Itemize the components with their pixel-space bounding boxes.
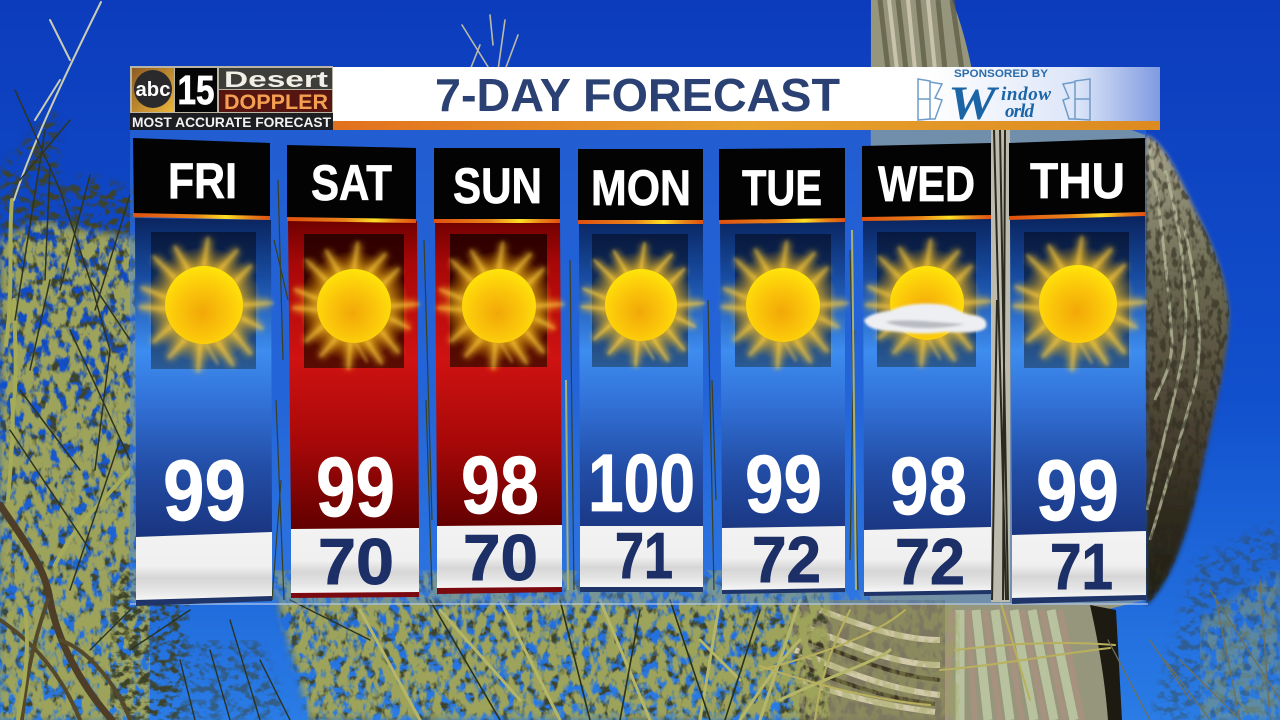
high temperature: 98 [890,441,967,532]
icon: sun [1014,232,1146,370]
high temperature: 99 [1036,443,1119,539]
lower rim of overlay [130,603,1148,605]
header orange strip [333,121,1160,130]
station logo: abc [136,79,170,101]
column: Sunday [434,148,564,594]
station logo: Desert [224,67,329,92]
sponsor: Window World [918,68,1090,130]
column: Friday [133,138,272,606]
high temperature: 99 [163,443,246,539]
cactus ribs seen between Wednesday and Thursday [991,130,1010,602]
column: Saturday [287,145,419,598]
column: Friday: FRI [168,153,237,209]
column: Tuesday [719,148,848,596]
low temperature: 72 [895,525,965,598]
column: Wednesday: WED [878,156,975,212]
icon: sun [722,234,848,368]
header white panel [333,67,1160,122]
station logo: MOST ACCURATE FORECAST [132,114,331,130]
icon: sun [582,234,704,367]
low temperature: 72 [752,523,821,596]
icon: sun [293,234,419,369]
day label [287,145,416,220]
mottled foliage: left tree [0,110,150,720]
icon: cloud [864,304,986,334]
column: Monday [578,149,704,592]
header bar [130,66,1160,130]
column: Saturday: SAT [311,155,392,211]
sponsor: Window World: SPONSORED BY [954,68,1049,80]
day label [434,148,560,220]
station logo: DOPPLER [224,91,328,114]
station logo: 15 [178,67,214,113]
column: Sunday: SUN [453,158,542,214]
high temperature: 100 [588,438,695,529]
mottled foliage: lower centre [110,570,960,720]
high temperature: 99 [745,439,822,530]
sponsor: Window World: orld [1005,101,1034,122]
day label [719,148,845,221]
day label [578,149,703,221]
column: Thursday [1009,138,1146,604]
title: 7-DAY FORECAST [435,69,840,121]
column: Tuesday: TUE [742,160,822,216]
saguaro cactus trunk [870,0,1145,720]
column: Monday: MON [591,160,691,216]
low temperature: 70 [463,521,538,594]
barrel cactus arm, lower centre [790,600,945,720]
cactus arm [1145,135,1229,605]
mottled foliage: lower right tree [1150,520,1280,720]
thin branches visible between columns [272,180,858,600]
day label [862,143,991,219]
high temperature: 98 [461,440,539,531]
column: Thursday: THU [1030,153,1125,209]
icon: sun [438,234,564,369]
low temperature: 71 [615,519,673,592]
icon: sun [140,232,272,371]
icon: left window [918,79,942,120]
station logo [130,66,333,130]
low temperature: 70 [318,525,394,598]
icon: right window [1063,79,1090,120]
glass overlay behind the day columns [130,130,1146,605]
low temperature: 71 [1050,530,1113,603]
day label [133,138,270,218]
high temperature: 99 [316,440,395,534]
sponsor: Window World: W [948,77,1000,130]
column: Wednesday [862,143,992,598]
day label [1009,138,1145,218]
icon: sun behind cloud [864,232,992,367]
sponsor: Window World: indow [1001,84,1051,105]
